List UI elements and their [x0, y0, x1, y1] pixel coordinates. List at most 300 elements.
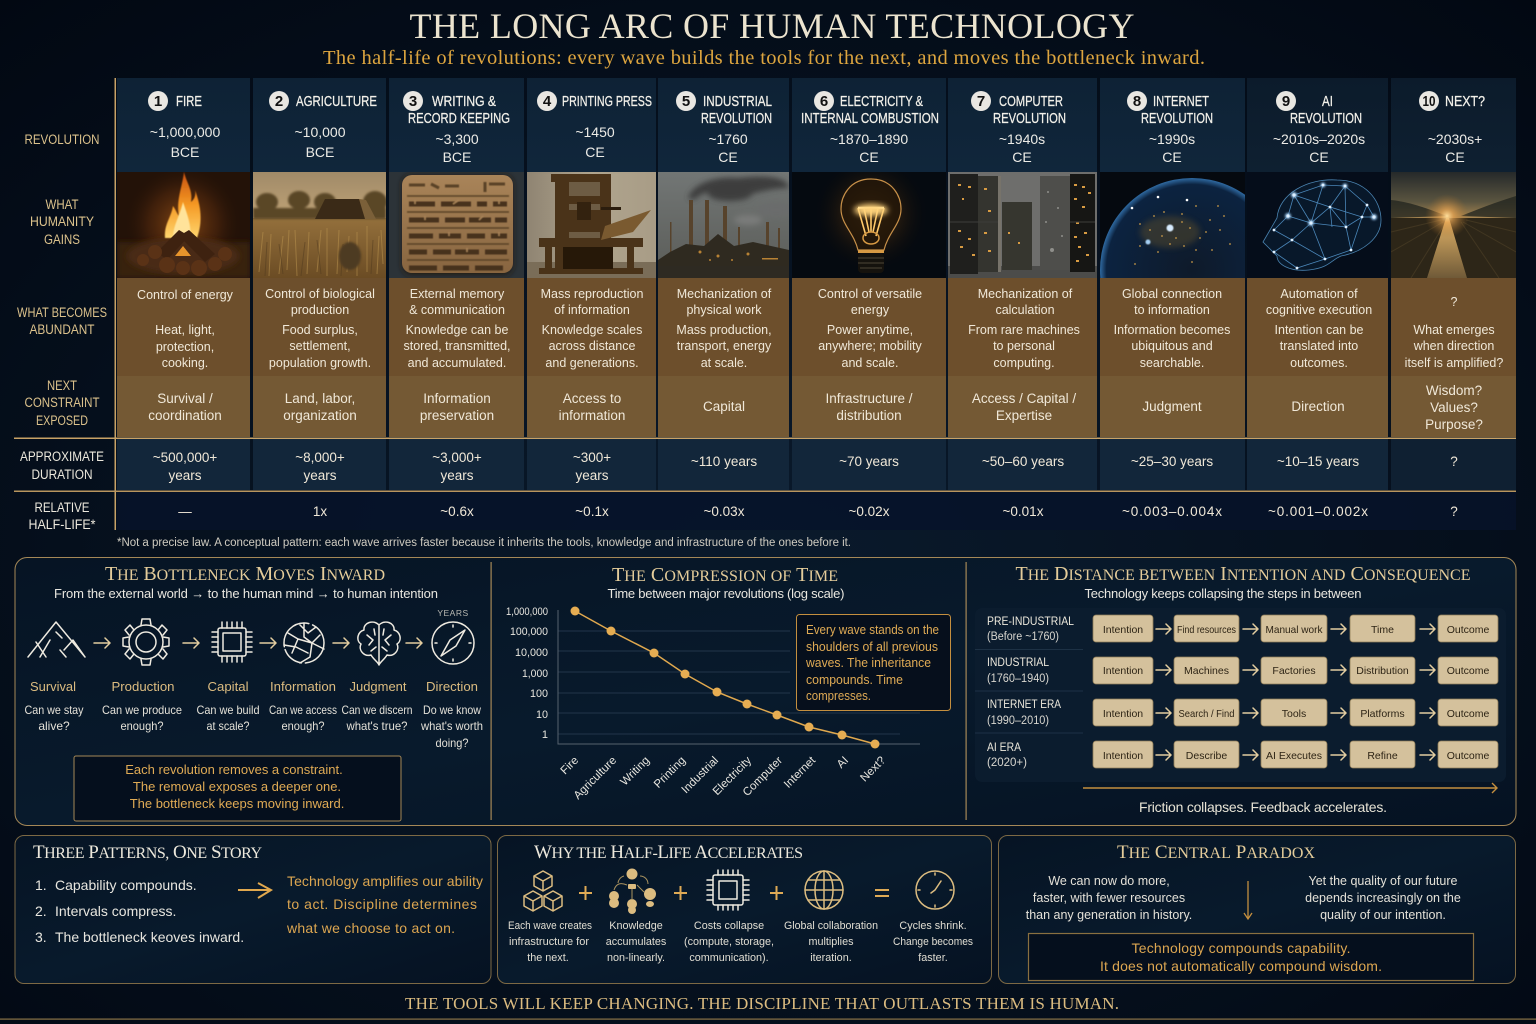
- column 2: agriculture: BCE: [306, 144, 334, 160]
- captions: Costs collapse: [694, 920, 764, 932]
- column 5: industrial: 5: [682, 93, 690, 110]
- middle panel frame: [15, 558, 1516, 826]
- icon: clock: [916, 871, 954, 909]
- approximate duration row: ~300+: [573, 450, 611, 465]
- captions: Global collaboration: [784, 920, 878, 932]
- column 4: printing press: PRINTING PRESS: [562, 94, 652, 110]
- captions: non-linearly.: [607, 952, 665, 964]
- captions: accumulates: [606, 936, 667, 948]
- what becomes abundant text row: ?: [1451, 295, 1458, 309]
- approximate duration row: ~50–60 years: [982, 454, 1064, 469]
- what becomes abundant text row: Intention can be: [1275, 323, 1364, 337]
- panel: the bottleneck moves inward: at scale?: [206, 719, 250, 733]
- what becomes abundant text row: and scale.: [842, 356, 898, 370]
- line chart: Internet: [782, 754, 819, 791]
- column 8: internet: INTERNET: [1153, 94, 1209, 110]
- what becomes abundant text row: of information: [554, 303, 630, 317]
- row: internet era: Intention: [1103, 708, 1143, 720]
- next constraint text row: Infrastructure /: [825, 391, 913, 406]
- column 2: agriculture: 2: [275, 93, 283, 110]
- row: pre-industrial: Find resources: [1177, 624, 1236, 636]
- column 7: computer: [948, 91, 1097, 278]
- image: wooden press: [527, 172, 656, 278]
- column 6: electricity: 6: [820, 93, 828, 110]
- left text: [1026, 874, 1192, 922]
- what becomes abundant text row: ubiquitous and: [1131, 339, 1213, 353]
- panel: the bottleneck moves inward: what's true?: [346, 719, 408, 733]
- column 5: industrial: ~1760: [708, 131, 748, 147]
- what becomes abundant text row: translated into: [1280, 339, 1358, 353]
- column 9: AI: [1247, 91, 1388, 278]
- captions: [508, 920, 974, 964]
- line chart: Computer: [741, 755, 785, 799]
- column 1: fire: BCE: [171, 144, 199, 160]
- panel: the bottleneck moves inward: enough?: [120, 719, 164, 733]
- column 6: electricity: INTERNAL COMBUSTION: [801, 111, 939, 127]
- arrow: [1244, 881, 1252, 919]
- arrow: [238, 883, 271, 898]
- column 9: AI: CE: [1309, 149, 1329, 165]
- right text: quality of our intention.: [1320, 908, 1446, 922]
- numbered list: 1.: [35, 877, 47, 893]
- row: internet era: Tools: [1282, 708, 1306, 720]
- approximate duration row: years: [575, 468, 609, 483]
- what becomes abundant text row: Global connection: [1122, 287, 1222, 301]
- callout: Every wave stands on the: [806, 622, 939, 637]
- column 8: internet: CE: [1162, 149, 1182, 165]
- what becomes abundant text row: anywhere; mobility: [818, 339, 923, 353]
- what becomes abundant text row: Mechanization of: [677, 287, 772, 301]
- line chart: Next?: [858, 755, 888, 784]
- captions: iteration.: [810, 952, 852, 964]
- row labels: WHAT: [46, 197, 78, 212]
- what becomes abundant text row: Knowledge can be: [406, 323, 508, 337]
- callout: Technology compounds capability.: [1132, 940, 1350, 956]
- what becomes abundant text row: cognitive execution: [1266, 303, 1372, 317]
- callout: shoulders of all previous: [806, 639, 938, 654]
- icon: globe: [805, 871, 843, 909]
- panel: why half-life accelerates: [498, 836, 992, 984]
- column 10: next: ~2030s+: [1428, 131, 1482, 147]
- line chart: Writing: [618, 755, 652, 788]
- column 4: printing press: [527, 91, 656, 278]
- icon: compass: [432, 622, 474, 664]
- row: industrial: INDUSTRIAL: [987, 657, 1050, 669]
- column 2: agriculture: ~10,000: [294, 124, 346, 140]
- what becomes abundant text row: Knowledge scales: [542, 323, 642, 337]
- panel: three patterns: [15, 836, 491, 984]
- callout: It does not automatically compound wisdom.: [1100, 958, 1382, 974]
- panel: the bottleneck moves inward: Can we produce: [102, 703, 182, 717]
- what becomes abundant text row: External memory: [410, 287, 505, 301]
- approximate duration row: years: [303, 468, 337, 483]
- row: AI era: AI ERA: [987, 742, 1021, 754]
- row: internet era: Outcome: [1447, 708, 1489, 720]
- line chart: 100: [530, 688, 548, 700]
- next constraint text row: Values?: [1430, 400, 1478, 415]
- column 5: industrial: INDUSTRIAL: [703, 94, 772, 110]
- questions: Can we stay: [24, 703, 84, 717]
- relative half-life row: ~0.6x: [440, 504, 474, 519]
- approximate duration row: ~25–30 years: [1131, 454, 1213, 469]
- next constraint text row: Purpose?: [1425, 417, 1483, 432]
- operators: [579, 886, 889, 900]
- panel: the bottleneck moves inward: enough?: [282, 719, 325, 733]
- callout: [796, 614, 950, 710]
- panel: the bottleneck moves inward: Direction: [426, 679, 478, 694]
- row: pre-industrial: (Before ~1760): [987, 631, 1059, 643]
- panel: the bottleneck moves inward: what's worth: [420, 719, 483, 733]
- icon: cubes: [524, 871, 562, 911]
- captions: Each wave creates: [508, 920, 593, 932]
- what becomes abundant text row: Food surplus,: [282, 323, 358, 337]
- panel: the bottleneck moves inward: Can we access: [269, 703, 337, 717]
- column 5: industrial: [658, 91, 794, 278]
- column 1: fire: [117, 91, 250, 282]
- relative half-life row: 1x: [313, 504, 327, 519]
- line chart: 1: [542, 729, 548, 741]
- line chart: 10,000: [515, 647, 548, 659]
- next constraint text row: distribution: [836, 408, 902, 423]
- column 4: printing press: CE: [585, 144, 605, 160]
- callout: The removal exposes a deeper one.: [133, 779, 341, 794]
- next constraint text row: Judgment: [1142, 399, 1202, 414]
- icon: gear: [123, 619, 169, 665]
- column 9: AI: AI: [1322, 94, 1333, 110]
- panel: the bottleneck moves inward: Information: [270, 679, 336, 694]
- subtitle: The half-life of revolutions: every wave builds the tools for the next, and moves the bottleneck inward.: [323, 47, 1205, 69]
- line chart: 1,000: [522, 668, 548, 680]
- what becomes abundant text row: and generations.: [545, 356, 639, 370]
- image: glowing bulb: [792, 172, 946, 278]
- approximate duration row: ~10–15 years: [1277, 454, 1359, 469]
- relative half-life row: ~0.001–0.002x: [1268, 504, 1368, 519]
- panel: the central paradox: [998, 836, 1516, 984]
- what becomes abundant text row: Control of energy: [137, 288, 234, 302]
- relative half-life row: ~0.1x: [575, 504, 609, 519]
- column 8: internet: ~1990s: [1149, 131, 1195, 147]
- approximate duration row: years: [440, 468, 474, 483]
- column 7: computer: COMPUTER: [999, 94, 1063, 110]
- numbered list: 3.: [35, 929, 47, 945]
- next constraint text row: information: [559, 408, 625, 423]
- relative half-life row: ~0.01x: [1003, 504, 1044, 519]
- what becomes abundant text row: physical work: [686, 303, 762, 317]
- right text: [1305, 874, 1461, 922]
- approximate duration row: ~70 years: [839, 454, 899, 469]
- next constraint text row: organization: [283, 408, 357, 423]
- column 1: fire: FIRE: [176, 94, 202, 110]
- row labels: EXPOSED: [36, 413, 88, 428]
- column 5: industrial: CE: [718, 149, 738, 165]
- what becomes abundant text row: and accumulated.: [408, 356, 506, 370]
- numbered list: 2.: [35, 903, 47, 919]
- right text: depends increasingly on the: [1305, 891, 1461, 905]
- approximate duration row: ~110 years: [691, 454, 757, 469]
- column 9: AI: 9: [1282, 93, 1290, 110]
- relative half-life row: ~0.03x: [704, 504, 745, 519]
- approximate duration row: ?: [1450, 454, 1458, 469]
- image: road to horizon: [1391, 172, 1516, 278]
- labels: Survival: [30, 679, 76, 694]
- column 7: computer: ~1940s: [999, 131, 1045, 147]
- next constraint text row: Direction: [1291, 399, 1345, 414]
- icon: chip: [707, 870, 749, 910]
- what becomes abundant text row: stored, transmitted,: [404, 339, 510, 353]
- approximate duration row: ~3,000+: [432, 450, 482, 465]
- row: AI era: Describe: [1186, 750, 1227, 762]
- arrows: [94, 638, 422, 648]
- what becomes abundant text row: population growth.: [269, 356, 371, 370]
- approximate duration row: years: [168, 468, 202, 483]
- row labels: HUMANITY: [30, 214, 94, 229]
- column 3: writing: [389, 91, 524, 278]
- next constraint text row: Access to: [563, 391, 621, 406]
- panel: the bottleneck moves inward: Production: [112, 679, 174, 694]
- what becomes abundant text row: protection,: [156, 340, 214, 354]
- callout: Each revolution removes a constraint.: [125, 762, 343, 777]
- right text: Yet the quality of our future: [1309, 874, 1458, 888]
- line chart: Electricity: [711, 754, 754, 798]
- relative half-life row: —: [178, 504, 192, 519]
- what becomes abundant text row: Heat, light,: [155, 323, 215, 337]
- panel: the bottleneck moves inward: Can we build: [196, 703, 260, 717]
- icon: knowledge network: [609, 868, 656, 914]
- approximate duration row: ~500,000+: [153, 450, 217, 465]
- column 2: agriculture: AGRICULTURE: [296, 94, 377, 110]
- image: earth at night: [1100, 172, 1245, 278]
- numbered list: [35, 877, 244, 945]
- row labels: NEXT: [47, 378, 77, 393]
- callout: [1028, 934, 1474, 980]
- column 2: agriculture: [253, 91, 387, 278]
- what becomes abundant text row: From rare machines: [968, 323, 1080, 337]
- column 3: writing: 3: [409, 93, 417, 110]
- captions: communication).: [689, 952, 769, 964]
- row: industrial: Intention: [1103, 665, 1143, 677]
- heading: THREE PATTERNS, ONE STORY: [33, 842, 262, 863]
- next constraint text row: [148, 383, 1483, 432]
- image: clay tablet: [389, 172, 524, 278]
- what becomes abundant text row: Mass production,: [676, 323, 772, 337]
- row: industrial: Outcome: [1447, 665, 1489, 677]
- captions: Cycles shrink.: [899, 920, 967, 932]
- line chart: [506, 606, 920, 802]
- line chart: 100,000: [510, 626, 548, 638]
- row labels: DURATION: [32, 467, 92, 482]
- row labels: REVOLUTION: [24, 132, 100, 147]
- callout: The bottleneck keeps moving inward.: [130, 796, 344, 811]
- next constraint text row: Capital: [703, 399, 745, 414]
- captions: infrastructure for: [509, 936, 589, 948]
- column 8: internet: REVOLUTION: [1141, 111, 1213, 127]
- row labels: HALF-LIFE*: [28, 517, 96, 532]
- column 10: next: CE: [1445, 149, 1465, 165]
- conclusion: [286, 873, 483, 936]
- subheading: From the external world → to the human mind → to human intention: [54, 586, 438, 601]
- callout: waves. The inheritance: [805, 655, 931, 670]
- row: industrial: [987, 657, 1498, 685]
- panel: the bottleneck moves inward: Do we know: [423, 703, 481, 717]
- row: AI era: Refine: [1367, 750, 1398, 762]
- image: neural network head: [1262, 179, 1382, 271]
- column 10: next: [1391, 91, 1516, 278]
- row: AI era: (2020+): [987, 757, 1027, 769]
- panel: the bottleneck moves inward: [24, 563, 483, 821]
- what becomes abundant text row: & communication: [409, 303, 505, 317]
- captions: the next.: [527, 952, 569, 964]
- relative half-life row: ~0.02x: [849, 504, 890, 519]
- table backgrounds: [14, 78, 1516, 530]
- row: industrial: Machines: [1184, 665, 1229, 677]
- heading: THE CENTRAL PARADOX: [1117, 842, 1315, 863]
- column 10: next: NEXT?: [1445, 94, 1485, 110]
- line chart: 1,000,000: [506, 606, 548, 618]
- column 1: fire: 1: [154, 93, 162, 110]
- row: pre-industrial: [987, 615, 1498, 643]
- captions: faster.: [918, 952, 948, 964]
- next constraint text row: Survival /: [157, 391, 213, 406]
- heading: THE BOTTLENECK MOVES INWARD: [105, 563, 385, 585]
- column 9: AI: REVOLUTION: [1290, 111, 1362, 127]
- row: industrial: Distribution: [1356, 665, 1409, 677]
- icon: cracked globe: [284, 623, 324, 663]
- what becomes abundant text row: at scale.: [701, 356, 747, 370]
- column 7: computer: 7: [977, 93, 985, 110]
- column 3: writing: ~3,300: [435, 131, 479, 147]
- left text: faster, with fewer resources: [1033, 891, 1185, 905]
- relative half-life row: [178, 504, 1458, 519]
- row: pre-industrial: Time: [1371, 624, 1394, 636]
- what becomes abundant text row: Information becomes: [1114, 323, 1230, 337]
- column 7: computer: REVOLUTION: [993, 111, 1066, 127]
- column 3: writing: RECORD KEEPING: [408, 111, 510, 127]
- what becomes abundant text row: [137, 287, 1503, 370]
- captions: Change becomes: [893, 936, 974, 948]
- line chart: Fire: [559, 755, 581, 777]
- row labels: CONSTRAINT: [24, 395, 100, 410]
- what becomes abundant text row: to personal: [993, 339, 1055, 353]
- heading: WHY THE HALF-LIFE ACCELERATES: [534, 842, 803, 863]
- column 3: writing: BCE: [443, 149, 471, 165]
- callout: compounds. Time: [806, 672, 903, 687]
- icon: chip: [212, 622, 252, 662]
- row: pre-industrial: Manual work: [1266, 624, 1323, 636]
- row: internet era: Platforms: [1360, 708, 1405, 720]
- row: AI era: Outcome: [1447, 750, 1489, 762]
- column 6: electricity: ELECTRICITY &: [840, 94, 923, 110]
- title: THE LONG ARC OF HUMAN TECHNOLOGY: [410, 6, 1134, 46]
- column 5: industrial: REVOLUTION: [701, 111, 772, 127]
- image: mainframe racks: [948, 172, 1097, 278]
- row: AI era: AI Executes: [1266, 750, 1322, 762]
- next constraint text row: coordination: [148, 408, 222, 423]
- column 7: computer: CE: [1012, 149, 1032, 165]
- row labels: APPROXIMATE: [20, 449, 104, 464]
- next constraint text row: Access / Capital /: [972, 391, 1076, 406]
- row labels: GAINS: [44, 232, 80, 247]
- image: factory smokestacks: [658, 172, 789, 278]
- row labels: WHAT BECOMES: [17, 305, 107, 320]
- column 6: electricity: [792, 91, 946, 278]
- next constraint text row: Land, labor,: [285, 391, 355, 406]
- callout: compresses.: [806, 688, 871, 703]
- column 9: AI: ~2010s–2020s: [1273, 131, 1365, 147]
- conclusion: to act. Discipline determines: [287, 896, 477, 912]
- panel: the bottleneck moves inward: Can we discern: [342, 703, 412, 717]
- row: pre-industrial: Outcome: [1447, 624, 1489, 636]
- line chart: 10: [536, 709, 548, 721]
- icon: mountain: [28, 622, 85, 657]
- what becomes abundant text row: computing.: [993, 356, 1055, 370]
- row: industrial: Factories: [1272, 665, 1316, 677]
- column 10: next: 10: [1422, 93, 1436, 110]
- approximate duration row: ~8,000+: [295, 450, 345, 465]
- row: pre-industrial: Intention: [1103, 624, 1143, 636]
- what becomes abundant text row: Control of versatile: [818, 287, 922, 301]
- subheading: Technology keeps collapsing the steps in between: [1084, 586, 1362, 601]
- relative half-life row: ?: [1450, 504, 1458, 519]
- what becomes abundant text row: calculation: [995, 303, 1055, 317]
- what becomes abundant text row: Control of biological: [265, 287, 375, 301]
- what becomes abundant text row: itself is amplified?: [1405, 356, 1503, 370]
- icon: brain: [358, 622, 400, 665]
- what becomes abundant text row: transport, energy: [677, 339, 772, 353]
- column 1: fire: ~1,000,000: [150, 124, 220, 140]
- heading: THE DISTANCE BETWEEN INTENTION AND CONSEQUENCE: [1016, 563, 1470, 585]
- what becomes abundant text row: settlement,: [289, 339, 351, 353]
- line chart: Industrial: [680, 755, 721, 796]
- approximate duration row: [153, 450, 1458, 483]
- row labels: ABUNDANT: [30, 322, 94, 337]
- numbered list: The bottleneck keoves inward.: [55, 929, 244, 945]
- column 6: electricity: ~1870–1890: [830, 131, 908, 147]
- next constraint text row: Expertise: [996, 408, 1052, 423]
- row labels: RELATIVE: [34, 500, 90, 515]
- what becomes abundant text row: production: [291, 303, 349, 317]
- column 3: writing: WRITING &: [432, 94, 496, 110]
- next constraint text row: Information: [423, 391, 491, 406]
- line chart: AI: [835, 755, 851, 771]
- what becomes abundant text row: Automation of: [1280, 287, 1358, 301]
- relative half-life row: ~0.003–0.004x: [1122, 504, 1222, 519]
- row: AI era: Intention: [1103, 750, 1143, 762]
- captions: (compute, storage,: [684, 936, 774, 948]
- image: campfire: [117, 172, 250, 278]
- panel: compression of time: [506, 564, 950, 802]
- column 4: printing press: 4: [543, 93, 552, 110]
- next constraint text row: preservation: [420, 408, 494, 423]
- conclusion: what we choose to act on.: [286, 920, 455, 936]
- line chart: Printing: [652, 755, 688, 791]
- callout: [74, 756, 401, 821]
- captions: multiplies: [808, 936, 854, 948]
- what becomes abundant text row: when direction: [1413, 339, 1494, 353]
- row: internet era: [987, 699, 1498, 727]
- heading: THE COMPRESSION OF TIME: [612, 564, 838, 586]
- conclusion: Technology amplifies our ability: [287, 873, 483, 889]
- what becomes abundant text row: Mass reproduction: [541, 287, 643, 301]
- what becomes abundant text row: What emerges: [1413, 323, 1495, 337]
- column 6: electricity: CE: [859, 149, 879, 165]
- what becomes abundant text row: Mechanization of: [978, 287, 1073, 301]
- panel: the bottleneck moves inward: Judgment: [350, 679, 407, 694]
- line chart: Agriculture: [572, 755, 619, 802]
- column 8: internet: [1100, 91, 1284, 362]
- panel: the bottleneck moves inward: doing?: [436, 736, 469, 750]
- column 8: internet: 8: [1133, 93, 1141, 110]
- subheading: Time between major revolutions (log scale): [608, 586, 844, 601]
